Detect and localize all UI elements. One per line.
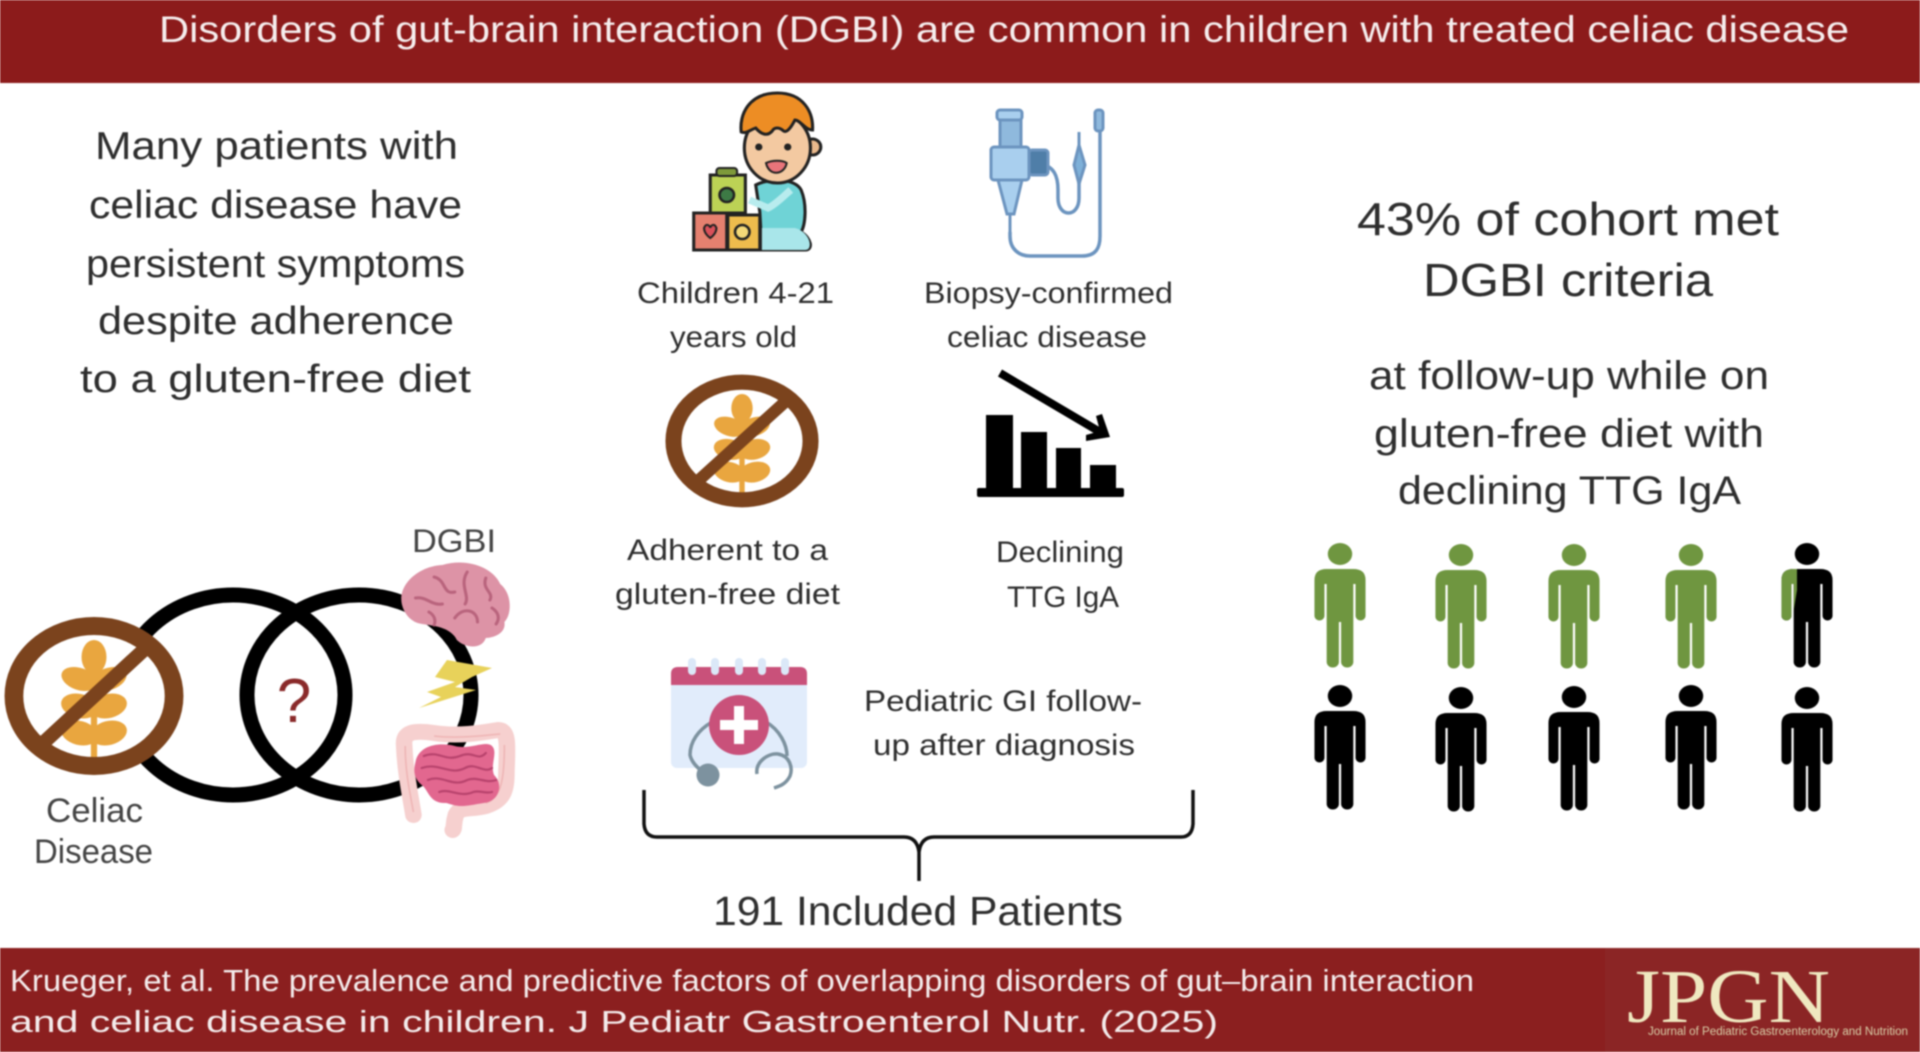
label: Biopsy-confirmed celiac disease: Biopsy-confirmed	[924, 277, 1173, 310]
brace grouping criteria	[644, 790, 1193, 881]
left text block: persistent symptoms: Many patients with	[95, 125, 458, 168]
label: Children 4-21 years old: Children 4-21	[637, 277, 834, 310]
label: Adherent to a gluten-free diet: gluten-free diet	[615, 578, 841, 611]
right text: follow-up conditions: declining TTG IgA	[1398, 469, 1741, 513]
icon: declining bar chart	[977, 373, 1124, 497]
right text: follow-up conditions	[1369, 354, 1769, 513]
citation	[10, 963, 1474, 1039]
JPGN logo: Journal of Pediatric Gastroenterology and Nutrition	[1648, 1026, 1908, 1038]
label: Adherent to a gluten-free diet: Adherent to a	[627, 534, 828, 567]
label: Celiac Disease: Disease	[34, 833, 153, 871]
label: Pediatric GI follow-up after diagnosis: Pediatric GI follow-	[864, 685, 1142, 718]
icon: no wheat	[9, 620, 179, 772]
icon: child with blocks	[694, 93, 821, 250]
JPGN logo	[1605, 948, 1920, 1052]
right text: follow-up conditions: at follow-up while on	[1369, 354, 1769, 398]
left text block: persistent symptoms: despite adherence	[98, 300, 454, 343]
title: Disorders of gut-brain interaction (DGBI) are common in children with treated celiac disease	[159, 9, 1849, 50]
right text: follow-up conditions: gluten-free diet with	[1374, 412, 1764, 456]
right heading: 43% of cohort met DGBI criteria: 43% of cohort met	[1357, 193, 1779, 245]
icon: calendar with stethoscope	[671, 658, 807, 788]
venn diagram: celiac disease and DGBI overlap	[9, 562, 510, 830]
question mark: ?	[277, 667, 311, 736]
left text block: persistent symptoms: celiac disease have	[89, 184, 462, 227]
icon: brain	[401, 562, 510, 646]
citation: Krueger, et al. The prevalence and predictive factors of overlapping disorders of gut–brain interaction	[10, 963, 1474, 998]
label: Children 4-21 years old	[637, 277, 834, 354]
JPGN logo: JPGN	[1627, 955, 1830, 1039]
icon: lightning bolt	[419, 660, 492, 708]
label: Celiac Disease: Celiac	[46, 792, 143, 830]
label: Declining TTG IgA: TTG IgA	[1007, 581, 1119, 614]
right heading: 43% of cohort met DGBI criteria: DGBI criteria	[1423, 254, 1713, 306]
label: Children 4-21 years old: years old	[670, 321, 797, 354]
left text block: persistent symptoms: to a gluten-free diet	[80, 358, 471, 401]
header banner	[0, 0, 1920, 83]
icon: no wheat, gluten-free diet	[673, 382, 811, 500]
label: Biopsy-confirmed celiac disease	[924, 277, 1173, 354]
label: 191 Included Patients: 191 Included Patients	[713, 888, 1123, 934]
icon: intestines	[404, 730, 507, 830]
left text block: persistent symptoms: persistent symptoms	[86, 243, 465, 286]
label: Pediatric GI follow-up after diagnosis	[864, 685, 1142, 762]
label: Pediatric GI follow-up after diagnosis: up after diagnosis	[873, 729, 1135, 762]
label: Adherent to a gluten-free diet	[615, 534, 841, 611]
icon: endoscope	[991, 110, 1103, 256]
label: Celiac Disease	[34, 792, 153, 871]
label: Biopsy-confirmed celiac disease: celiac disease	[947, 321, 1147, 354]
label: DGBI: DGBI	[412, 523, 496, 559]
citation: and celiac disease in children. J Pediatr Gastroenterol Nutr. (2025)	[10, 1004, 1218, 1039]
right heading: 43% of cohort met DGBI criteria	[1357, 193, 1779, 306]
pictogram: 43 percent of 10 people	[1314, 543, 1833, 812]
label: Declining TTG IgA	[996, 536, 1124, 614]
label: Declining TTG IgA: Declining	[996, 536, 1124, 569]
footer banner	[0, 948, 1920, 1052]
left text block: persistent symptoms	[80, 125, 471, 401]
